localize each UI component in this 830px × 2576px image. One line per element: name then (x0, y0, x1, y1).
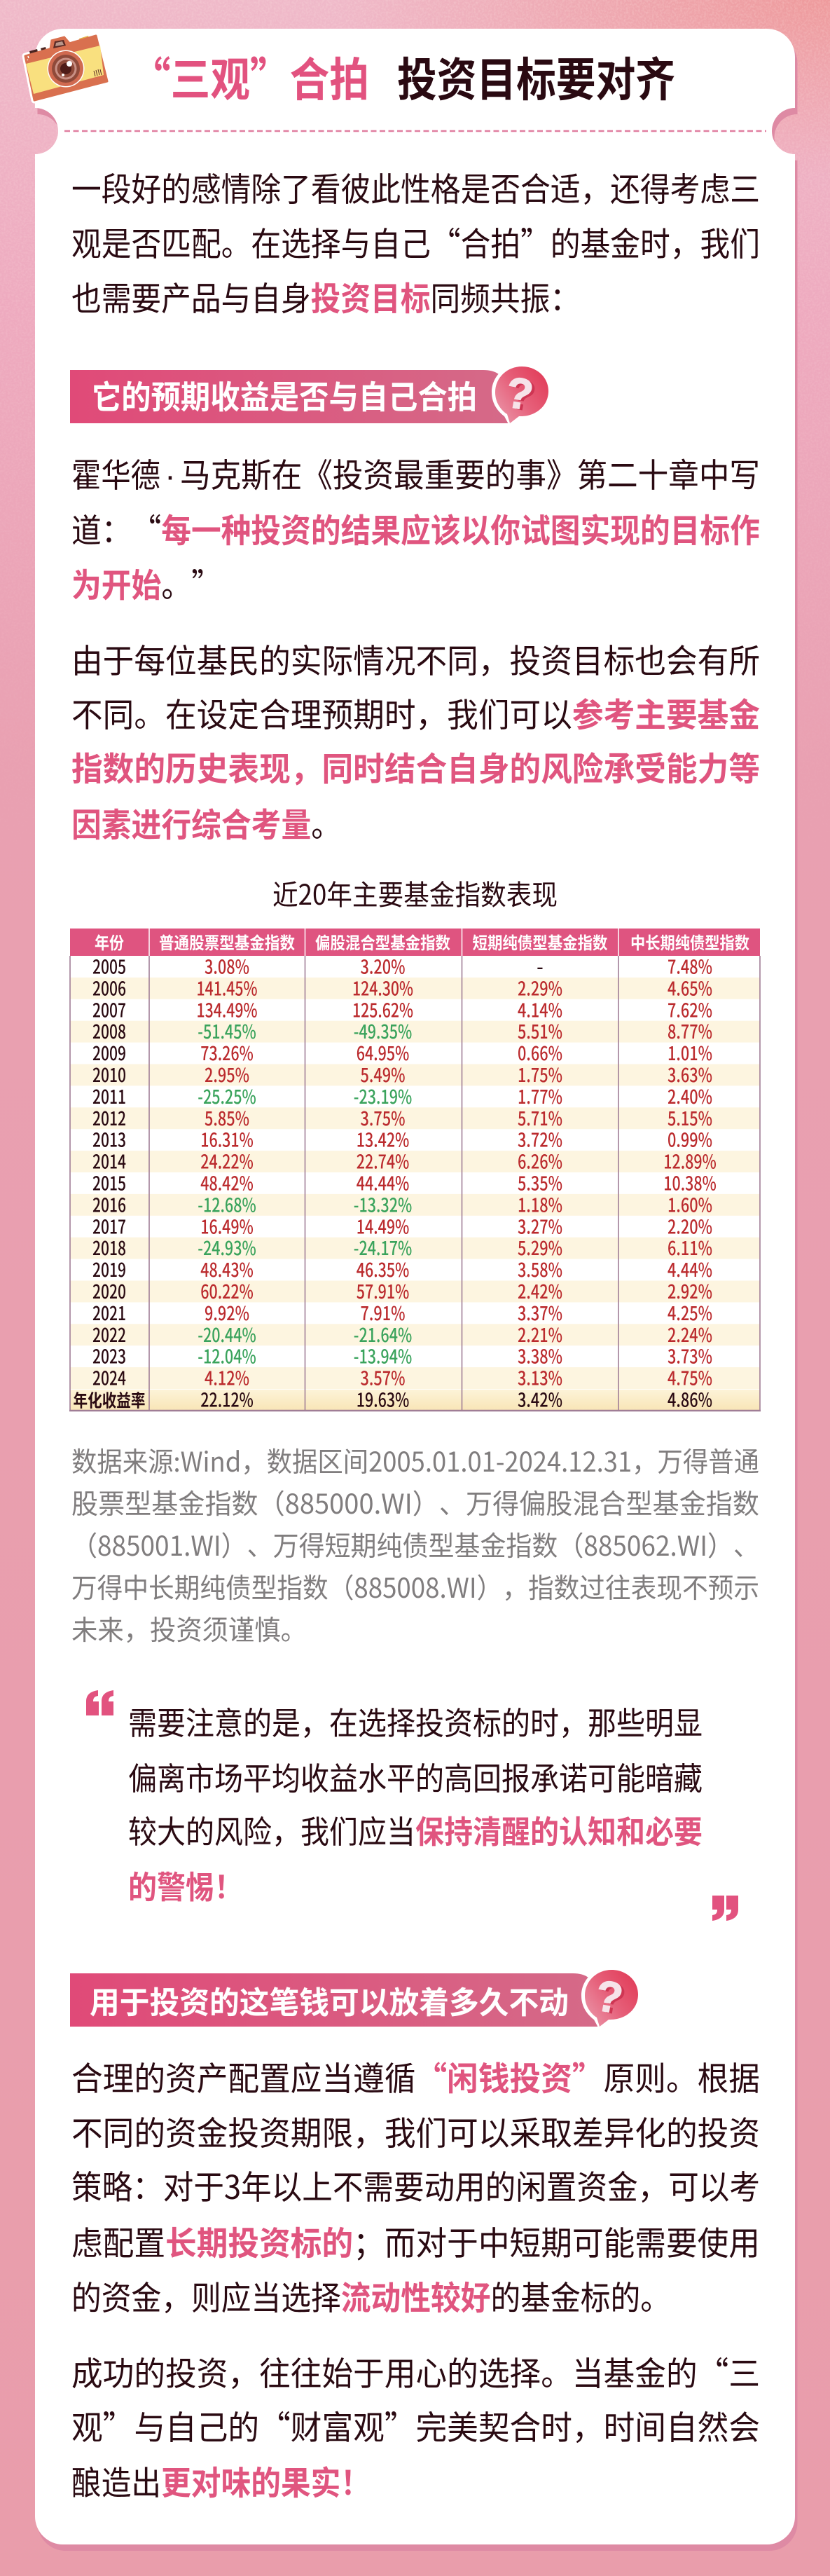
paragraph: idle money principle: 虑配置长期投资标的；而对于中短期可能需要使用 (71, 2217, 760, 2265)
row 2010: 3.63% (668, 1060, 712, 1088)
row 2021: 3.37% (518, 1299, 562, 1326)
paragraph: reasonable expectations: 因素进行综合考量。 (71, 798, 341, 847)
paragraph: conclusion: 酿造出更对味的果实！ (71, 2456, 371, 2505)
row 2007: 125.62% (352, 995, 413, 1022)
table header: 中长期纯债型指数 (630, 929, 749, 954)
row 2005 (92, 952, 712, 980)
row 2011: 2011 (92, 1082, 126, 1109)
row 2006: 2.29% (518, 973, 562, 1001)
row 2010 (92, 1060, 712, 1088)
table header (70, 929, 760, 956)
row 2021: 2021 (92, 1299, 126, 1326)
row 2019: 48.43% (200, 1255, 254, 1282)
callout: risk warning (128, 1698, 703, 1907)
row 2015: 44.44% (357, 1169, 409, 1195)
row 2021: 4.25% (668, 1299, 712, 1326)
row 2020: 60.22% (200, 1277, 254, 1304)
heading 2 text: 用于投资的这笔钱可以放着多久不动 (90, 1978, 569, 2022)
row 2020: 2.92% (668, 1277, 712, 1304)
row 2013: 3.72% (518, 1125, 562, 1153)
table header: 年份 (95, 929, 124, 954)
row 2013: 2013 (92, 1125, 126, 1153)
row 2005: 3.08% (205, 952, 249, 980)
paragraph: idle money principle (71, 2052, 760, 2320)
row 2017: 14.49% (357, 1212, 409, 1239)
icon: question bubble: ? (506, 370, 540, 422)
row 2024 (92, 1364, 712, 1391)
row 2019: 4.44% (668, 1255, 712, 1282)
paragraph: Howard Marks quote: 道：“每一种投资的结果应该以你试图实现的目标作 (71, 504, 760, 552)
intro paragraph: 观是否匹配。在选择与自己“合拍”的基金时，我们 (71, 217, 760, 266)
row 2016: 1.18% (518, 1190, 562, 1217)
row 2018: -24.93% (198, 1233, 256, 1261)
callout: risk warning: 需要注意的是，在选择投资标的时，那些明显 (128, 1698, 703, 1743)
row 2014: 6.26% (518, 1147, 562, 1174)
row 2008: 8.77% (668, 1017, 712, 1044)
row 2024: 4.12% (205, 1364, 249, 1391)
row 2005: - (537, 952, 544, 980)
row 2009: 1.01% (668, 1039, 712, 1066)
row annualized return: 22.12% (200, 1385, 254, 1413)
title: “三观”合拍 (131, 43, 369, 110)
row 2020: 2020 (92, 1277, 126, 1304)
row 2022: 2.24% (668, 1320, 712, 1348)
row 2009: 73.26% (200, 1039, 254, 1066)
paragraph: reasonable expectations: 不同。在设定合理预期时，我们可以参考主要基金 (71, 688, 760, 737)
row 2022: -20.44% (198, 1320, 256, 1348)
row 2011: 1.77% (518, 1082, 562, 1109)
row 2007: 7.62% (668, 995, 712, 1022)
row 2014: 24.22% (200, 1147, 254, 1174)
row 2012: 5.71% (518, 1104, 562, 1131)
icon: camera (25, 36, 107, 100)
row 2022: 2022 (92, 1320, 126, 1348)
row 2010: 2.95% (205, 1060, 249, 1088)
row 2012: 5.15% (668, 1104, 712, 1131)
row 2013: 0.99% (668, 1125, 712, 1153)
row 2015: 48.42% (200, 1169, 254, 1195)
row 2020: 57.91% (357, 1277, 409, 1304)
data source note: 股票型基金指数（885000.WI）、万得偏股混合型基金指数 (71, 1483, 759, 1522)
row 2023: 3.38% (518, 1342, 562, 1369)
paragraph: Howard Marks quote: 为开始。” (71, 559, 221, 607)
icon: question bubble (492, 364, 551, 427)
row 2024: 3.57% (360, 1364, 405, 1391)
icon: question bubble: ? (592, 1971, 626, 2024)
row 2008: -49.35% (354, 1017, 412, 1044)
paragraph: idle money principle: 合理的资产配置应当遵循“闲钱投资”原则。根据 (71, 2052, 760, 2100)
row 2013: 13.42% (357, 1125, 409, 1153)
row 2011: -23.19% (354, 1082, 412, 1109)
row 2005: 7.48% (668, 952, 712, 980)
row 2023 (92, 1342, 712, 1369)
row 2020: 2.42% (518, 1277, 562, 1304)
data source note: （885001.WI）、万得短期纯债型基金指数（885062.WI）、 (71, 1525, 759, 1564)
row 2018: 5.29% (518, 1233, 562, 1261)
paragraph: Howard Marks quote: 马克斯在《投资最重要的事》第二十章中写 (180, 448, 760, 497)
row 2007: 2007 (92, 995, 126, 1022)
table header: 普通股票型基金指数 (159, 929, 295, 954)
intro paragraph: 一段好的感情除了看彼此性格是否合适，还得考虑三 (71, 163, 760, 211)
row 2017: 16.49% (200, 1212, 254, 1239)
icon: closing quote mark (712, 1896, 738, 1921)
row 2006: 141.45% (196, 973, 258, 1001)
row 2024: 4.75% (668, 1364, 712, 1391)
table: fund index returns 2005-2024 (69, 929, 761, 1413)
row 2005: 3.20% (360, 952, 405, 980)
table header: 偏股混合型基金指数 (315, 929, 450, 954)
row 2018: -24.17% (354, 1233, 412, 1261)
row 2020 (92, 1277, 712, 1304)
row 2014 (92, 1147, 717, 1174)
paragraph: conclusion: 观”与自己的“财富观”完美契合时，时间自然会 (71, 2401, 760, 2449)
paragraph: idle money principle: 的资金，则应当选择流动性较好的基金标的。 (71, 2271, 670, 2320)
paragraph: reasonable expectations: 指数的历史表现，同时结合自身的风险承受能力等 (71, 742, 760, 790)
alternating row bands (70, 978, 760, 1411)
row 2021 (92, 1299, 712, 1326)
data source note: 未来，投资须谨慎。 (71, 1609, 307, 1648)
row 2014: 12.89% (663, 1147, 717, 1174)
row 2013: 16.31% (200, 1125, 254, 1153)
row 2023: 3.73% (668, 1342, 712, 1369)
row 2006: 124.30% (352, 973, 413, 1001)
callout: risk warning: 的警惕！ (128, 1862, 243, 1907)
row 2008: 2008 (92, 1017, 126, 1044)
icon: question bubble: ? (595, 1973, 630, 2025)
paragraph: reasonable expectations: 由于每位基民的实际情况不同，投资目标也会有所 (71, 634, 760, 683)
row 2015 (92, 1169, 717, 1195)
row 2022: 2.21% (518, 1320, 562, 1348)
row 2009: 2009 (92, 1039, 126, 1066)
row 2021: 9.92% (205, 1299, 249, 1326)
row annualized return: 3.42% (518, 1385, 562, 1413)
row 2014: 2014 (92, 1147, 126, 1174)
paragraph: conclusion: 成功的投资，往往始于用心的选择。当基金的“三 (71, 2347, 760, 2395)
row 2006: 4.65% (668, 973, 712, 1001)
row 2024: 2024 (92, 1364, 126, 1391)
data source note: 数据来源:Wind，数据区间2005.01.01-2024.12.31，万得普通 (71, 1441, 759, 1480)
paragraph: Howard Marks quote: · (165, 457, 176, 494)
row 2005: 2005 (92, 952, 126, 980)
row 2019: 3.58% (518, 1255, 562, 1282)
table title: 近20年主要基金指数表现 (272, 872, 558, 913)
paragraph: Howard Marks quote: 霍华德 (71, 448, 160, 497)
heading 1 text: 它的预期收益是否与自己合拍 (92, 372, 477, 418)
section heading 2 (70, 1967, 640, 2030)
row 2013 (92, 1125, 712, 1153)
data source note: 万得中长期纯债型指数（885008.WI），指数过往表现不预示 (71, 1567, 759, 1606)
title: 投资目标要对齐 (397, 43, 675, 110)
row 2015: 10.38% (663, 1169, 717, 1195)
icon: question bubble: ? (502, 368, 537, 420)
row 2019: 46.35% (357, 1255, 409, 1282)
title (131, 43, 675, 110)
row 2022: -21.64% (354, 1320, 412, 1348)
row 2012: 5.85% (205, 1104, 249, 1131)
callout: risk warning: 较大的风险，我们应当保持清醒的认知和必要 (128, 1807, 703, 1852)
row 2016: -13.32% (354, 1190, 412, 1217)
row 2019: 2019 (92, 1255, 126, 1282)
row 2010: 5.49% (360, 1060, 405, 1088)
row 2006: 2006 (92, 973, 126, 1001)
data source note (71, 1441, 759, 1648)
row 2016: -12.68% (198, 1190, 256, 1217)
row 2021: 7.91% (360, 1299, 405, 1326)
row 2017 (92, 1212, 712, 1239)
intro paragraph: 也需要产品与自身投资目标同频共振： (71, 272, 580, 320)
row annualized return: 年化收益率 (73, 1388, 146, 1413)
row 2007: 134.49% (196, 995, 258, 1022)
table header: 短期纯债型基金指数 (472, 929, 608, 954)
row 2011 (92, 1082, 712, 1109)
row annualized return (73, 1385, 712, 1413)
paragraph: idle money principle: 策略：对于3年以上不需要动用的闲置资金，可以考 (71, 2160, 760, 2209)
row 2019 (92, 1255, 712, 1282)
row 2023: -12.04% (198, 1342, 256, 1369)
row 2009 (92, 1039, 712, 1066)
row 2012: 3.75% (360, 1104, 405, 1131)
row 2012 (92, 1104, 712, 1131)
paragraph: conclusion (71, 2347, 760, 2505)
paragraph: reasonable expectations (71, 634, 760, 847)
row 2015: 5.35% (518, 1169, 562, 1195)
paragraph: idle money principle: 不同的资金投资期限，我们可以采取差异化的投资 (71, 2106, 760, 2155)
row 2006 (92, 973, 712, 1001)
row 2009: 64.95% (357, 1039, 409, 1066)
row 2016 (92, 1190, 712, 1217)
row 2008: 5.51% (518, 1017, 562, 1044)
row 2010: 1.75% (518, 1060, 562, 1088)
row 2016: 2016 (92, 1190, 126, 1217)
row 2023: 2023 (92, 1342, 126, 1369)
row 2016: 1.60% (668, 1190, 712, 1217)
icon: opening quote mark (86, 1690, 113, 1715)
row 2018: 2018 (92, 1233, 126, 1261)
callout: risk warning: 偏离市场平均收益水平的高回报承诺可能暗藏 (128, 1753, 703, 1799)
paragraph: Howard Marks quote (71, 448, 760, 607)
row 2010: 2010 (92, 1060, 126, 1088)
row 2023: -13.94% (354, 1342, 412, 1369)
section heading 1 (70, 364, 551, 427)
row 2012: 2012 (92, 1104, 126, 1131)
row 2007 (92, 995, 712, 1022)
row 2022 (92, 1320, 712, 1348)
row 2017: 2.20% (668, 1212, 712, 1239)
row 2017: 3.27% (518, 1212, 562, 1239)
row 2008: -51.45% (198, 1017, 256, 1044)
row 2009: 0.66% (518, 1039, 562, 1066)
row 2018: 6.11% (668, 1233, 712, 1261)
intro paragraph (71, 163, 760, 320)
row 2008 (92, 1017, 712, 1044)
icon: question bubble (581, 1967, 640, 2030)
row 2014: 22.74% (357, 1147, 409, 1174)
row 2024: 3.13% (518, 1364, 562, 1391)
row 2011: 2.40% (668, 1082, 712, 1109)
row 2011: -25.25% (198, 1082, 256, 1109)
row 2007: 4.14% (518, 995, 562, 1022)
row 2018 (92, 1233, 712, 1261)
row 2015: 2015 (92, 1169, 126, 1195)
row annualized return: 19.63% (357, 1385, 409, 1413)
pink textured background (0, 0, 830, 737)
row annualized return: 4.86% (668, 1385, 712, 1413)
row 2017: 2017 (92, 1212, 126, 1239)
